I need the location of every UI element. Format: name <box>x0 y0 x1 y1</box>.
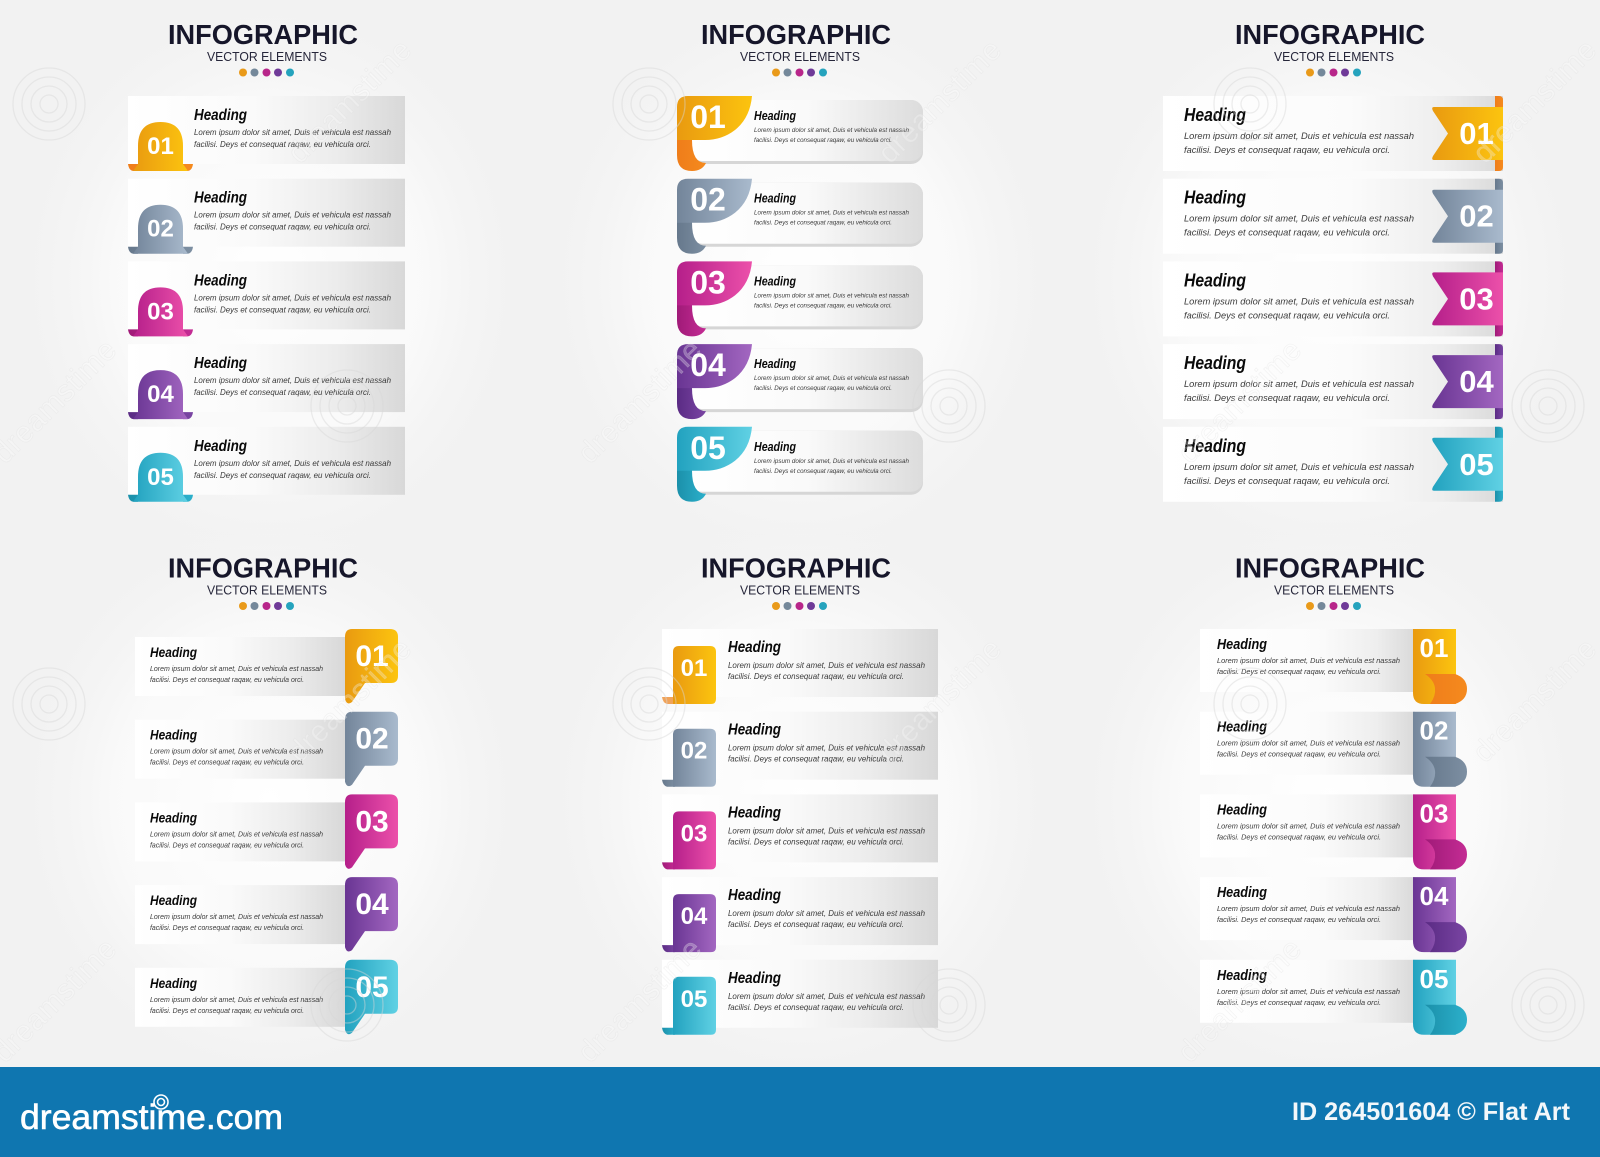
row 05 <box>1163 427 1503 502</box>
row 04: 04 <box>1459 364 1494 399</box>
heading: Heading <box>150 644 197 660</box>
title block: VECTOR ELEMENTS <box>207 49 327 64</box>
body text: Lorem ipsum dolor sit amet, Duis et vehicula est nassah <box>194 459 391 468</box>
body text <box>1184 131 1414 156</box>
icon: flag tab 02 <box>677 179 752 254</box>
watermark text: dreamstime <box>282 33 418 170</box>
row 02: 02 <box>690 182 726 218</box>
body text: facilisi. Deys et consequat raqaw, eu vehicula orci. <box>1184 145 1390 156</box>
row 04 <box>135 877 398 952</box>
row 01 <box>1163 96 1503 171</box>
heading: Heading <box>728 639 781 656</box>
row 01 <box>135 629 398 703</box>
row 03: 03 <box>681 820 707 847</box>
row 01: 01 <box>147 133 174 160</box>
body text: facilisi. Deys et consequat raqaw, eu vehicula orci. <box>1217 998 1381 1007</box>
icon: ribbon 02 <box>1432 179 1503 254</box>
row 05: 05 <box>1420 964 1448 994</box>
heading: Heading <box>194 272 247 289</box>
icon: ribbon 01 <box>1432 96 1503 171</box>
watermark text: dreamstime <box>1172 932 1308 1069</box>
icon: speech bubble 05 <box>345 960 398 1034</box>
icon: flag tab 04 <box>677 344 752 419</box>
heading: Heading <box>1217 636 1267 653</box>
heading: Heading <box>194 355 247 372</box>
title block <box>701 19 891 76</box>
title block <box>168 19 358 76</box>
row 04: 04 <box>1420 881 1449 911</box>
body text: Lorem ipsum dolor sit amet, Duis et vehicula est nassah <box>1217 656 1400 665</box>
icon: dome badge 05 <box>128 453 193 502</box>
body text: facilisi. Deys et consequat raqaw, eu vehicula orci. <box>754 468 892 475</box>
body text <box>150 995 323 1015</box>
body text <box>1184 214 1414 239</box>
heading: Heading <box>1217 967 1267 984</box>
heading: Heading <box>728 887 781 904</box>
row 02: 02 <box>1459 199 1494 234</box>
title block <box>701 552 891 610</box>
body text: Lorem ipsum dolor sit amet, Duis et vehicula est nassah <box>194 128 391 137</box>
title block: INFOGRAPHIC <box>701 552 891 584</box>
body text: facilisi. Deys et consequat raqaw, eu vehicula orci. <box>1184 228 1390 239</box>
row 02 <box>662 712 938 787</box>
row 04: 04 <box>690 347 726 383</box>
row 05 <box>677 427 923 502</box>
row 02 <box>128 179 405 254</box>
icon: scroll tab 05 <box>1413 960 1467 1035</box>
body text: facilisi. Deys et consequat raqaw, eu vehicula orci. <box>1184 393 1390 404</box>
body text: facilisi. Deys et consequat raqaw, eu vehicula orci. <box>728 837 904 846</box>
row 04: 04 <box>147 381 174 408</box>
body text: facilisi. Deys et consequat raqaw, eu vehicula orci. <box>150 840 304 849</box>
icon: folded square 01 <box>662 646 716 704</box>
heading: Heading <box>1217 884 1267 901</box>
row 01: 01 <box>681 655 707 682</box>
row 05 <box>135 960 398 1034</box>
body text <box>728 909 925 929</box>
heading: Heading <box>194 190 247 207</box>
row 05: 05 <box>681 986 707 1013</box>
heading: Heading <box>1184 435 1246 456</box>
row 02 <box>677 179 923 254</box>
row 04 <box>128 344 405 419</box>
row 03 <box>662 794 938 869</box>
row 05: 05 <box>355 971 389 1004</box>
panel: dome badges, top left <box>128 19 405 502</box>
row 02: 02 <box>681 738 707 765</box>
icon: dome badge 03 <box>128 287 193 336</box>
title block: INFOGRAPHIC <box>1235 552 1425 584</box>
title block: VECTOR ELEMENTS <box>1274 582 1394 598</box>
panel: folded squares, bottom centre <box>662 552 938 1035</box>
row 02 <box>1163 179 1503 254</box>
body text <box>194 376 391 397</box>
title block: INFOGRAPHIC <box>168 19 358 50</box>
row 03: 03 <box>355 805 389 838</box>
panel: speech bubbles, bottom left <box>135 552 398 1034</box>
title block <box>1235 19 1425 76</box>
watermark text: dreamstime <box>572 333 708 470</box>
body text: Lorem ipsum dolor sit amet, Duis et vehicula est nassah <box>1217 904 1400 913</box>
body text: facilisi. Deys et consequat raqaw, eu vehicula orci. <box>728 755 904 764</box>
body text <box>1217 739 1400 759</box>
icon: speech bubble 02 <box>345 712 398 786</box>
body text <box>1184 379 1414 404</box>
body text: Lorem ipsum dolor sit amet, Duis et vehicula est nassah <box>1184 131 1414 142</box>
body text: facilisi. Deys et consequat raqaw, eu vehicula orci. <box>1184 476 1390 487</box>
body text: facilisi. Deys et consequat raqaw, eu vehicula orci. <box>194 223 371 232</box>
icon: dome badge 04 <box>128 370 193 419</box>
body text <box>1184 462 1414 487</box>
footer credit: ID 264501604 © Flat Art <box>1292 1098 1571 1126</box>
heading: Heading <box>728 970 781 987</box>
body text: Lorem ipsum dolor sit amet, Duis et vehicula est nassah <box>150 829 323 838</box>
heading: Heading <box>150 727 197 743</box>
body text <box>728 992 925 1012</box>
row 02: 02 <box>355 723 389 756</box>
row 04 <box>662 877 938 952</box>
heading: Heading <box>1184 269 1246 290</box>
heading: Heading <box>150 892 197 908</box>
row 05: 05 <box>147 464 174 491</box>
body text <box>728 744 925 764</box>
body text <box>1217 904 1400 924</box>
row 05 <box>662 960 938 1035</box>
panel: flag tabs, top centre <box>677 19 923 502</box>
row 01: 01 <box>1420 633 1448 663</box>
body text <box>754 210 909 227</box>
body text: facilisi. Deys et consequat raqaw, eu vehicula orci. <box>150 923 304 932</box>
row 01: 01 <box>1459 116 1494 151</box>
body text: Lorem ipsum dolor sit amet, Duis et vehicula est nassah <box>1217 739 1400 748</box>
heading: Heading <box>150 975 197 991</box>
body text <box>1217 821 1400 841</box>
row 03 <box>677 261 923 336</box>
heading: Heading <box>194 438 247 455</box>
heading: Heading <box>194 107 247 124</box>
body text: facilisi. Deys et consequat raqaw, eu vehicula orci. <box>194 140 371 149</box>
icon: folded square 05 <box>662 977 716 1035</box>
heading: Heading <box>1184 352 1246 373</box>
body text: Lorem ipsum dolor sit amet, Duis et vehicula est nassah <box>1217 821 1400 830</box>
heading: Heading <box>1217 801 1267 818</box>
title block: INFOGRAPHIC <box>701 19 891 50</box>
body text <box>194 293 391 314</box>
heading: Heading <box>754 357 796 371</box>
body text <box>150 747 323 767</box>
row 03 <box>1200 794 1467 869</box>
body text: Lorem ipsum dolor sit amet, Duis et vehicula est nassah <box>728 992 925 1001</box>
footer logo: dreamstime.com <box>20 1098 283 1137</box>
heading: Heading <box>1184 187 1246 208</box>
body text: Lorem ipsum dolor sit amet, Duis et vehicula est nassah <box>1217 987 1400 996</box>
icon: scroll tab 02 <box>1413 712 1467 787</box>
body text: Lorem ipsum dolor sit amet, Duis et vehicula est nassah <box>194 376 391 385</box>
body text: Lorem ipsum dolor sit amet, Duis et vehicula est nassah <box>754 458 909 465</box>
row 02 <box>1200 712 1467 787</box>
heading: Heading <box>1217 719 1267 736</box>
title block: VECTOR ELEMENTS <box>1274 49 1394 64</box>
body text <box>194 459 391 480</box>
row 03: 03 <box>147 298 174 325</box>
title block <box>168 552 358 610</box>
icon: speech bubble 01 <box>345 629 398 703</box>
body text: Lorem ipsum dolor sit amet, Duis et vehicula est nassah <box>150 747 323 756</box>
body text: Lorem ipsum dolor sit amet, Duis et vehicula est nassah <box>1184 214 1414 225</box>
row 03: 03 <box>690 264 726 300</box>
body text: facilisi. Deys et consequat raqaw, eu vehicula orci. <box>728 672 904 681</box>
row 03 <box>128 261 405 336</box>
body text: Lorem ipsum dolor sit amet, Duis et vehicula est nassah <box>150 912 323 921</box>
watermark text: dreamstime <box>572 932 708 1069</box>
body text: Lorem ipsum dolor sit amet, Duis et vehicula est nassah <box>1184 462 1414 473</box>
body text: facilisi. Deys et consequat raqaw, eu vehicula orci. <box>754 302 892 309</box>
heading: Heading <box>754 109 796 123</box>
title block <box>1235 552 1425 610</box>
body text <box>754 127 909 144</box>
body text: Lorem ipsum dolor sit amet, Duis et vehicula est nassah <box>728 826 925 835</box>
icon: folded square 02 <box>662 729 716 787</box>
title block: VECTOR ELEMENTS <box>740 582 860 598</box>
body text: facilisi. Deys et consequat raqaw, eu vehicula orci. <box>150 675 304 684</box>
body text: facilisi. Deys et consequat raqaw, eu vehicula orci. <box>728 1003 904 1012</box>
row 02 <box>135 712 398 786</box>
row 03 <box>1163 261 1503 336</box>
body text <box>1184 296 1414 321</box>
icon: scroll tab 04 <box>1413 877 1467 952</box>
watermark text: dreamstime <box>282 632 418 769</box>
row 05 <box>128 427 405 502</box>
row 04: 04 <box>355 888 389 921</box>
heading: Heading <box>754 440 796 454</box>
body text <box>728 826 925 846</box>
icon: ribbon 03 <box>1432 261 1503 336</box>
icon: flag tab 03 <box>677 261 752 336</box>
watermark text: dreamstime <box>1172 333 1308 470</box>
row 01 <box>677 96 923 171</box>
body text: facilisi. Deys et consequat raqaw, eu vehicula orci. <box>1217 915 1381 924</box>
body text: facilisi. Deys et consequat raqaw, eu vehicula orci. <box>150 758 304 767</box>
body text: Lorem ipsum dolor sit amet, Duis et vehicula est nassah <box>728 909 925 918</box>
watermark text: dreamstime <box>872 33 1008 170</box>
title block: VECTOR ELEMENTS <box>740 49 860 64</box>
row 05: 05 <box>690 430 726 466</box>
row 01 <box>662 629 938 704</box>
body text: facilisi. Deys et consequat raqaw, eu vehicula orci. <box>1217 667 1381 676</box>
body text <box>150 912 323 932</box>
body text: Lorem ipsum dolor sit amet, Duis et vehicula est nassah <box>754 210 909 217</box>
row 01 <box>1200 629 1467 704</box>
icon: scroll tab 03 <box>1413 794 1467 869</box>
body text: facilisi. Deys et consequat raqaw, eu vehicula orci. <box>1217 832 1381 841</box>
title block: VECTOR ELEMENTS <box>207 582 327 598</box>
body text <box>194 211 391 232</box>
row 02: 02 <box>1420 716 1448 746</box>
row 01: 01 <box>690 99 726 135</box>
body text <box>1217 656 1400 676</box>
row 02: 02 <box>147 216 174 243</box>
body text <box>1217 987 1400 1007</box>
body text: Lorem ipsum dolor sit amet, Duis et vehicula est nassah <box>1184 379 1414 390</box>
body text: Lorem ipsum dolor sit amet, Duis et vehicula est nassah <box>728 661 925 670</box>
body text: Lorem ipsum dolor sit amet, Duis et vehicula est nassah <box>754 127 909 134</box>
body text: Lorem ipsum dolor sit amet, Duis et vehicula est nassah <box>754 292 909 299</box>
row 04 <box>1163 344 1503 419</box>
body text <box>194 128 391 149</box>
icon: folded square 04 <box>662 894 716 952</box>
body text: Lorem ipsum dolor sit amet, Duis et vehicula est nassah <box>1184 296 1414 307</box>
icon: speech bubble 04 <box>345 877 398 952</box>
body text: facilisi. Deys et consequat raqaw, eu vehicula orci. <box>1184 310 1390 321</box>
icon: dome badge 02 <box>128 205 193 254</box>
body text: facilisi. Deys et consequat raqaw, eu vehicula orci. <box>194 388 371 397</box>
row 03: 03 <box>1459 281 1494 316</box>
icon: scroll tab 01 <box>1413 629 1467 704</box>
panel: scroll tabs, bottom right <box>1200 552 1467 1035</box>
body text: facilisi. Deys et consequat raqaw, eu vehicula orci. <box>728 920 904 929</box>
row 04 <box>1200 877 1467 952</box>
body text: Lorem ipsum dolor sit amet, Duis et vehicula est nassah <box>194 211 391 220</box>
row 04 <box>677 344 923 419</box>
row 05: 05 <box>1459 447 1494 482</box>
body text: facilisi. Deys et consequat raqaw, eu vehicula orci. <box>150 1006 304 1015</box>
body text: Lorem ipsum dolor sit amet, Duis et vehicula est nassah <box>754 375 909 382</box>
body text: facilisi. Deys et consequat raqaw, eu vehicula orci. <box>194 471 371 480</box>
body text <box>728 661 925 681</box>
icon: flag tab 05 <box>677 427 752 502</box>
row 01 <box>128 96 405 171</box>
watermark text: dreamstime <box>872 632 1008 769</box>
heading: Heading <box>754 274 796 288</box>
row 01: 01 <box>355 640 389 673</box>
icon: speech bubble 03 <box>345 794 398 869</box>
watermark text: dreamstime <box>1467 33 1600 170</box>
heading: Heading <box>150 809 197 825</box>
row 03 <box>135 794 398 869</box>
icon: folded square 03 <box>662 811 716 869</box>
title block: INFOGRAPHIC <box>1235 19 1425 50</box>
icon: flag tab 01 <box>677 96 752 171</box>
body text: Lorem ipsum dolor sit amet, Duis et vehicula est nassah <box>150 664 323 673</box>
body text: facilisi. Deys et consequat raqaw, eu vehicula orci. <box>754 385 892 392</box>
body text: Lorem ipsum dolor sit amet, Duis et vehicula est nassah <box>728 744 925 753</box>
icon: ribbon 05 <box>1432 427 1503 502</box>
footer banner <box>0 1067 1600 1157</box>
title block: INFOGRAPHIC <box>168 552 358 584</box>
body text: Lorem ipsum dolor sit amet, Duis et vehicula est nassah <box>150 995 323 1004</box>
icon: ribbon 04 <box>1432 344 1503 419</box>
watermark text: dreamstime <box>1467 632 1600 769</box>
body text <box>150 664 323 684</box>
body text: facilisi. Deys et consequat raqaw, eu vehicula orci. <box>754 137 892 144</box>
body text: facilisi. Deys et consequat raqaw, eu vehicula orci. <box>754 220 892 227</box>
row 03: 03 <box>1420 798 1448 828</box>
body text <box>754 458 909 475</box>
heading: Heading <box>728 804 781 821</box>
body text <box>754 375 909 392</box>
body text <box>754 292 909 309</box>
icon: dome badge 01 <box>128 122 193 171</box>
row 04: 04 <box>681 903 708 930</box>
body text <box>150 829 323 849</box>
body text: Lorem ipsum dolor sit amet, Duis et vehicula est nassah <box>194 293 391 302</box>
heading: Heading <box>1184 104 1246 125</box>
heading: Heading <box>728 722 781 739</box>
panel: ribbon tabs, top right <box>1163 19 1503 502</box>
body text: facilisi. Deys et consequat raqaw, eu vehicula orci. <box>194 305 371 314</box>
body text: facilisi. Deys et consequat raqaw, eu vehicula orci. <box>1217 750 1381 759</box>
row 05 <box>1200 960 1467 1035</box>
heading: Heading <box>754 192 796 206</box>
